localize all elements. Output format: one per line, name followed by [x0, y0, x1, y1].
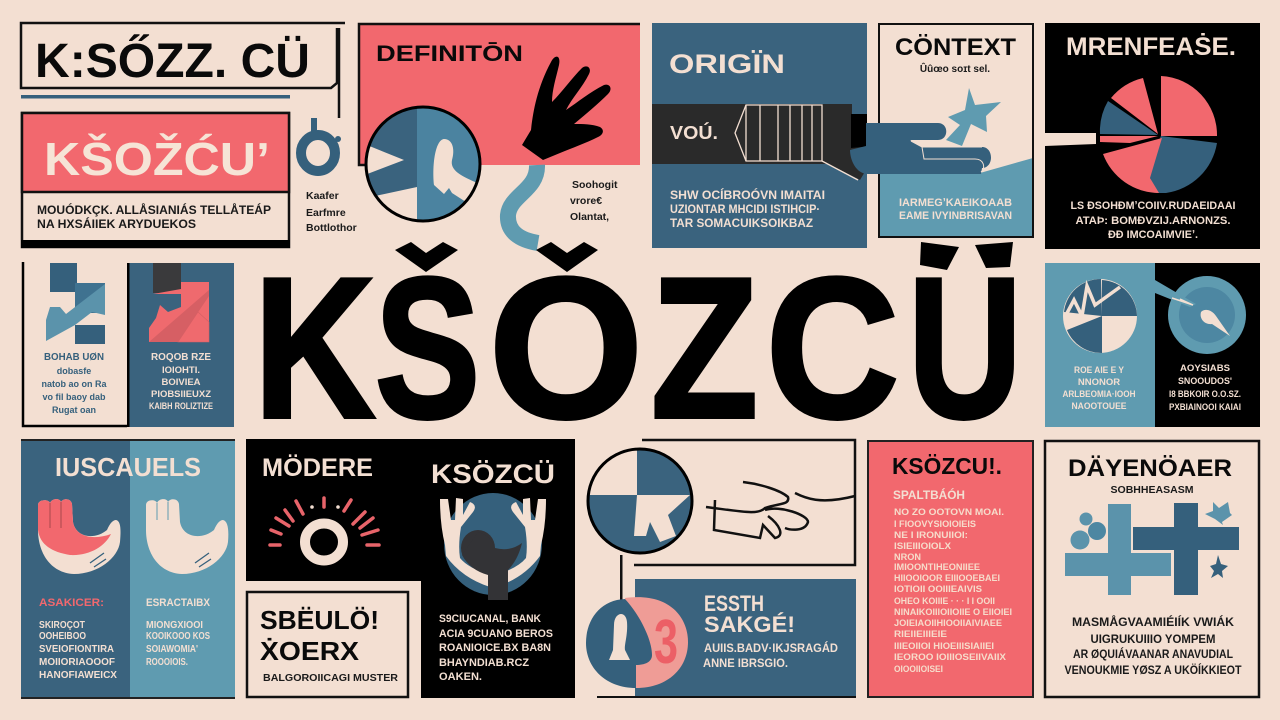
text: coral column body: OHEO KOIIIE · · · I I OOII — [894, 596, 995, 607]
text: left column: vo fil baoy dab — [42, 392, 106, 402]
text: right hand caption: SOIAWOMIA' — [146, 644, 198, 655]
text: coral column body: OIOOIIOISEI — [894, 664, 943, 675]
text: black block description: ROANIOICE.BX BA8N — [439, 642, 551, 654]
text: dayenoaer description: AR ØQUIÁVAANAR ANAVUDIAL — [1073, 648, 1233, 661]
pie chart — [1100, 76, 1217, 193]
text: right hand caption: ROOOIOIS. — [146, 657, 188, 668]
text: teal side labels: NNONOR — [1078, 377, 1120, 388]
text: right hand caption — [146, 597, 211, 668]
heading: coral column: KSÖZCU!. — [892, 453, 1002, 479]
text: left column: BOHAB UØN — [44, 352, 104, 363]
text: left hand caption: ASAKICER: — [39, 597, 104, 609]
text: left hand caption: OOHEIBOO — [39, 631, 86, 642]
heading: sbeulo card: ẊOERX — [260, 636, 360, 666]
text: definition side note: Soohogit — [572, 179, 618, 191]
heading: sbeulo card: SBËULÖ! — [260, 605, 379, 635]
text: coral column body: NINAIKOIIIOIIOIIE O EIIOIEI — [894, 607, 1012, 618]
text: coral column body: NE I IRONUIIOI: — [894, 530, 968, 541]
text: dayenoaer description: VENOUKMIE YØSZ A UKÖÍKKIEOT — [1064, 664, 1242, 677]
text: esth description — [703, 642, 838, 670]
text: teal side labels: ARLBEOMIA·IOOH — [1062, 389, 1136, 400]
panel: mid right pie pair — [1045, 263, 1260, 427]
text: origin description: TAR SOMACUIKSOIKBAZ — [670, 218, 813, 230]
text: black side labels: I8 BBKOIR O.O.SZ. — [1169, 389, 1241, 400]
main title: S — [375, 237, 480, 460]
main title: K — [254, 237, 375, 460]
text: black block description: BHAYNDIAB.RCZ — [439, 657, 529, 669]
icon: coral geometric block — [149, 263, 209, 342]
text: navy column: IOIOHTI. — [162, 365, 200, 376]
text: left column: natob ao on Ra — [42, 379, 107, 389]
text: coral column subhead: SPALTBÁÓH — [893, 487, 965, 502]
text: context description — [899, 197, 1012, 222]
text: black block description: S9CIUCANAL, BANK — [439, 613, 541, 625]
panel: sbeulo card — [247, 592, 408, 697]
text: teal side labels — [1062, 365, 1136, 412]
icon: portrait and number badge: 3 — [654, 608, 678, 677]
heading: esth sakge — [704, 591, 795, 637]
icon: cream hand — [146, 499, 228, 574]
heading: modere: MÖDERE — [262, 453, 373, 482]
text: black side labels — [1169, 363, 1241, 413]
text: coral card description: NA HXSÁIIEK ARYDUEKOS — [37, 216, 196, 231]
text: coral card description: MOUÓDKÇK. ALLÅSIANIÁS TELLÅTEÁP — [37, 202, 271, 217]
panel: black pie chart — [1045, 23, 1260, 249]
text: left column — [42, 352, 107, 415]
text: right hand caption: ESRACTAIBX — [146, 597, 211, 609]
text: navy column: ROQOB RZE — [151, 352, 211, 363]
text: small side note: Bottlothor — [306, 222, 357, 234]
panel: line hand box — [585, 440, 855, 605]
text: navy column: BOIVIEA — [161, 377, 201, 388]
panel: top left title box — [21, 23, 345, 118]
text: context description: IARMEGʼKAEIKOAAB — [899, 197, 1012, 209]
icon: coral hand — [38, 499, 121, 574]
heading: second word: KSÖZCÜ — [431, 459, 555, 489]
icon: quartered circle — [585, 445, 697, 557]
text: right hand caption: KOOIKOOO KOS — [146, 631, 210, 642]
text: coral column body: IIIEOIIOI HIOEIIISIAIIEI — [894, 641, 994, 652]
text: esth description: ANNE IBRSGIO. — [703, 658, 788, 670]
text: definition side note: vrore€ — [570, 195, 602, 207]
icon: quartered pie — [1063, 279, 1137, 353]
panel: mid left navy column — [127, 263, 234, 427]
icon: black hand — [522, 57, 611, 160]
heading: hands panel: IUSCAUELS — [55, 452, 201, 482]
text: navy column: KAIBH ROLIZTIZE — [149, 401, 213, 412]
text: coral card description — [37, 202, 271, 231]
text: pie description: ÐÐ IMCOAIMVIEʼ. — [1108, 229, 1198, 241]
text: teal side labels: NAOOTOUEE — [1072, 401, 1126, 412]
text: dayenoaer subtitle: SOBHHEASASM — [1110, 484, 1194, 496]
icon: portrait and number badge — [586, 597, 688, 688]
text: left hand caption: HANOFIAWEICX — [39, 670, 117, 681]
text: origin description: UZIONTAR MHCIDI ISTIHCIP· — [670, 204, 820, 216]
main title: U — [908, 237, 1022, 460]
icon: target dial — [1155, 276, 1246, 354]
text: coral column body — [894, 507, 1012, 675]
text: coral column body: JOIEIAOIIHIOOIIAIVIAEE — [894, 618, 1002, 629]
heading: black panel title: MRENFEAṠE. — [1066, 32, 1236, 61]
text: black side labels: AOYSIABS — [1180, 363, 1230, 374]
main title — [254, 237, 1022, 460]
heading: context: CÖNTEXT — [895, 34, 1016, 61]
text: context description: EAME IVYINBRISAVAN — [899, 210, 1012, 222]
text: esth description: AUIIS.BADV·IKJSRAGÁD — [704, 642, 838, 655]
panel: context — [879, 24, 1033, 237]
text: pie description: ATAÞ: BOMÐVZIJ.ARNONZS. — [1076, 215, 1230, 227]
heading: esth sakge: ESSTH — [704, 591, 764, 616]
panel: coral text column — [868, 441, 1033, 697]
heading: dayenoaer: DÄYENÖAER — [1068, 455, 1232, 482]
heading: origin: ORIGÏN — [669, 49, 785, 79]
text: dayenoaer description: UIGRUKUIIIO YOMPEM — [1090, 634, 1216, 646]
icon: navy reaching hand — [850, 123, 991, 174]
heading: coral word: KŠOŽĆU’ — [44, 133, 270, 185]
text: definition side note — [570, 179, 618, 223]
text: definition side note: Olantat, — [570, 211, 609, 223]
heading: definition: DEFINITŌN — [376, 41, 523, 66]
text: left hand caption: SKIROÇOT — [39, 620, 85, 631]
heading: top left title: K:SŐZZ. CÜ — [35, 34, 310, 88]
panel: origin — [652, 23, 867, 248]
text: left hand caption: MOIIORIAOOOF — [39, 657, 115, 668]
icon: sleeve band: VOÚ. — [670, 122, 718, 143]
text: coral column body: NRON — [894, 552, 921, 563]
main title: Z — [651, 237, 758, 460]
text: coral column body: HIIOOIOOR EIIIOOEBAEI — [894, 573, 1000, 584]
text: origin description: SHW OCÍBROÓVN IMAITAI — [670, 189, 825, 202]
text: teal side labels: ROE AIE E Y — [1074, 365, 1125, 376]
text: small side note — [306, 190, 357, 234]
text: small side note: Earfmre — [306, 207, 346, 219]
icon: teal star — [946, 88, 1001, 146]
icon: split circle portrait — [364, 106, 482, 222]
text: left column: dobasfe — [57, 366, 91, 376]
text: black block description: ACIA 9CUANO BEROS — [439, 628, 553, 640]
text: dayenoaer description — [1064, 616, 1242, 677]
heading: sbeulo card — [260, 605, 379, 666]
text: origin description — [670, 189, 825, 230]
text: black block description: OAKEN. — [439, 671, 482, 683]
panel: coral word card — [21, 113, 290, 248]
panel: mid left cream column — [23, 262, 127, 426]
text: pie description — [1070, 200, 1236, 241]
panel: modere black block — [246, 439, 575, 698]
text: coral column body: RIEIIEIIIEIE — [894, 629, 947, 640]
text: small side note: Kaafer — [306, 190, 339, 202]
icon: teal hook — [508, 165, 538, 243]
text: pie description: LS ÐSOHÐMʼCOIIV.RUDAEIDAAI — [1070, 200, 1236, 212]
text: sbeulo caption: BALGOROIICAGI MUSTER — [263, 672, 398, 684]
icon: crossed plus shapes — [1065, 502, 1239, 595]
text: coral column body: I FIOOVYSIOIOIEIS — [894, 519, 976, 530]
text: left column: Rugat oan — [52, 405, 96, 415]
icon: ring ornament — [301, 118, 341, 171]
text: black side labels: PXBIAINOOI KAIAI — [1169, 402, 1241, 413]
icon: teal geometric block — [46, 263, 105, 344]
main title: O — [489, 237, 643, 460]
heading: esth sakge: SAKGÉ! — [704, 612, 795, 637]
text: left hand caption — [39, 597, 117, 681]
text: coral column body: IMIOONTIHEONIIEE — [894, 562, 980, 573]
panel: dayenoaer — [1045, 441, 1259, 697]
icon: outline hand — [706, 482, 855, 538]
text: navy column: PIOBSIIEUXZ — [151, 389, 211, 400]
text: coral column body: NO ZO OOTOVN MOAI. — [894, 507, 1004, 518]
text: context subtitle: Ûûœo soɪt sel. — [920, 62, 990, 75]
text: coral column body: IEOROO IOIIIOSEIIVAIIX — [894, 652, 1007, 663]
text: coral column body: ISIEIIIOIOLX — [894, 541, 952, 552]
panel: esth sakge — [586, 579, 856, 697]
text: left hand caption: SVEIOFIONTIRA — [39, 644, 114, 655]
text: right hand caption: MIONGXIOOI — [146, 620, 203, 631]
text: black side labels: SNOOUDOS' — [1178, 376, 1232, 387]
icon: hands around globe — [440, 493, 546, 600]
text: dayenoaer description: MASMÅGVAAMIÉIÍK VWIÁK — [1072, 616, 1235, 629]
text: black block description — [439, 613, 553, 683]
icon: sleeve band — [652, 104, 867, 180]
panel: hands comparison — [21, 440, 235, 698]
icon: radiant ring — [270, 498, 379, 560]
text: navy column — [149, 352, 213, 412]
panel: definition — [359, 24, 640, 243]
text: coral column body: IOTIOII OOIIIEAIVIS — [894, 584, 982, 595]
main title: C — [766, 237, 899, 460]
